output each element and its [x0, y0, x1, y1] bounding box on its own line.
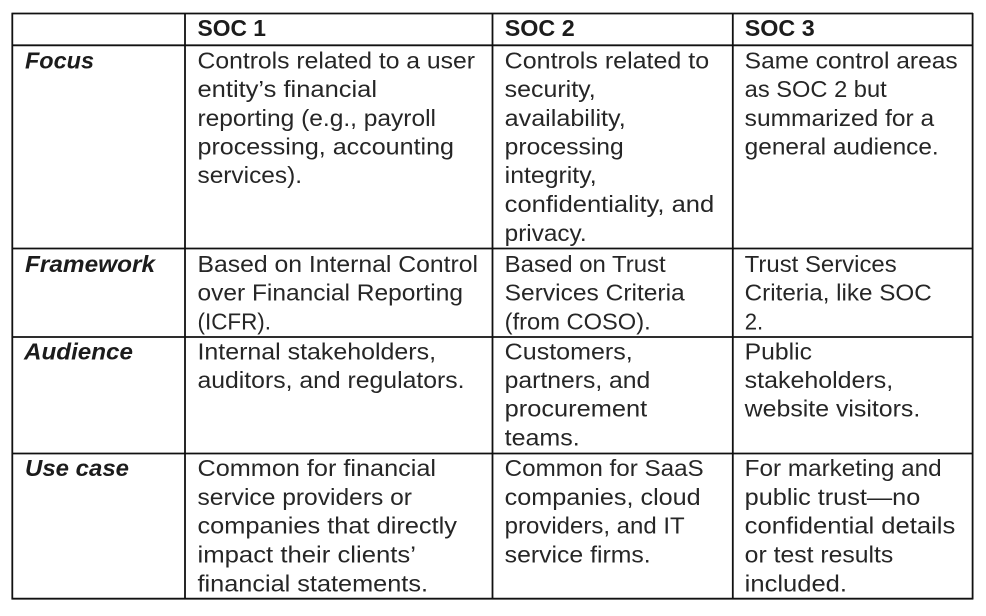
row: use case: or test results — [745, 542, 893, 568]
row: audience: Audience — [23, 338, 133, 364]
row: audience: teams. — [505, 424, 580, 450]
row: audience: website visitors. — [744, 396, 920, 422]
row: focus: general audience. — [745, 134, 939, 160]
row: audience: auditors, and regulators. — [198, 367, 464, 393]
row: use case: financial statements. — [198, 571, 428, 597]
row: focus: processing, accounting — [198, 134, 454, 160]
row: audience: partners, and — [505, 367, 650, 393]
row: focus: privacy. — [505, 220, 587, 246]
row: audience: Public — [745, 338, 812, 364]
row: focus: summarized for a — [745, 105, 935, 131]
row: focus: confidentiality, and — [505, 191, 714, 217]
row: framework: Based on Trust — [505, 251, 666, 277]
row: framework: Based on Internal Control — [198, 251, 478, 277]
row: framework — [25, 251, 932, 335]
row: focus: Focus — [25, 47, 94, 73]
row: focus: reporting (e.g., payroll — [198, 105, 436, 131]
row: focus: Controls related to — [505, 47, 709, 73]
row: focus: Controls related to a user — [198, 47, 475, 73]
row: focus — [25, 47, 958, 246]
row: audience: procurement — [505, 396, 648, 422]
row: use case: Common for SaaS — [505, 455, 704, 481]
row: framework: Criteria, like SOC — [745, 280, 932, 306]
row: audience: Customers, — [505, 338, 633, 364]
row: focus: availability, — [505, 105, 626, 131]
row: use case: public trust—no — [745, 484, 920, 510]
row: focus: Same control areas — [745, 47, 958, 73]
row: audience — [23, 338, 920, 450]
header row: SOC 3 — [745, 15, 815, 41]
row: framework: (from COSO). — [505, 309, 651, 335]
header row: SOC 1 — [198, 15, 266, 41]
row: use case: impact their clients’ — [198, 542, 416, 568]
row: focus: security, — [505, 76, 596, 102]
row: focus: as SOC 2 but — [745, 76, 887, 102]
row: framework: (ICFR). — [198, 309, 271, 335]
row: use case — [25, 455, 955, 597]
header row — [198, 15, 815, 41]
row: use case: For marketing and — [745, 455, 942, 481]
row: focus: entity’s financial — [198, 76, 377, 102]
row: framework: Framework — [25, 251, 157, 277]
row: focus: processing — [505, 134, 624, 160]
row: use case: included. — [745, 571, 847, 597]
row: use case: service firms. — [505, 542, 651, 568]
header row: SOC 2 — [505, 15, 575, 41]
row: use case: confidential details — [745, 512, 955, 538]
row: use case: companies that directly — [198, 512, 457, 538]
row: use case: providers, and IT — [505, 512, 685, 538]
row: framework: 2. — [745, 309, 763, 335]
row: audience: stakeholders, — [745, 367, 893, 393]
row: framework: Services Criteria — [505, 280, 686, 306]
row: framework: over Financial Reporting — [198, 280, 463, 306]
row: use case: Use case — [25, 455, 129, 481]
row: use case: service providers or — [198, 484, 412, 510]
row: audience: Internal stakeholders, — [198, 338, 436, 364]
row: use case: companies, cloud — [505, 484, 701, 510]
row: focus: services). — [198, 162, 302, 188]
row: focus: integrity, — [505, 162, 597, 188]
row: use case: Common for financial — [198, 455, 436, 481]
row: framework: Trust Services — [745, 251, 897, 277]
